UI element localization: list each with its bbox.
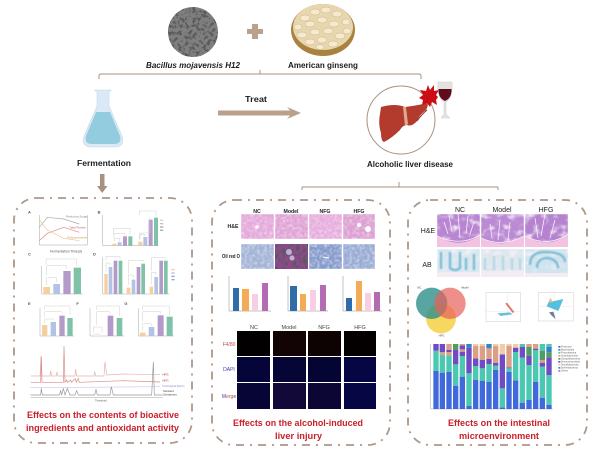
label: H&amp;E row: H&E bbox=[228, 224, 239, 230]
panel title: antioxidant activity: ingredients and antioxidant activity bbox=[26, 423, 180, 434]
chart legend: Campylobacterota bbox=[561, 358, 581, 361]
charts A to G bbox=[28, 210, 175, 336]
label: Alcoholic liver disease: Alcoholic liver disease bbox=[367, 160, 454, 169]
chart E: bars: E bbox=[28, 301, 31, 306]
intestinal column headers: NC bbox=[455, 207, 465, 214]
fluorescence column headers: NFG bbox=[318, 325, 330, 331]
lower bracket connector bbox=[302, 182, 498, 190]
PCA plot 1 bbox=[486, 293, 521, 322]
chart F: bars: F bbox=[76, 301, 79, 306]
chart: HPLC chromatograms: Standard bbox=[163, 389, 174, 393]
panel title: microenvironment: microenvironment bbox=[459, 431, 540, 442]
H&amp;E liver micrographs bbox=[241, 214, 375, 239]
bar chart: liver marker 3 bbox=[343, 276, 382, 311]
Oil red O liver micrographs bbox=[241, 244, 375, 269]
arrow: treat bbox=[218, 107, 301, 119]
H&amp;E intestinal micrographs bbox=[437, 214, 568, 247]
chart legend: Actinobacteriota bbox=[561, 355, 578, 358]
panel: intestinal microenvironment bbox=[408, 200, 587, 445]
liver histology column headers: NFG bbox=[320, 209, 330, 215]
bar chart: liver marker 2 bbox=[288, 276, 328, 311]
intestinal column headers: HFG bbox=[539, 207, 553, 214]
icon: American ginseng dish bbox=[291, 4, 355, 56]
icon: fermentation flask bbox=[83, 90, 123, 147]
label: American ginseng: American ginseng bbox=[288, 61, 358, 70]
chart F: bars bbox=[76, 301, 124, 336]
chart legend: Others bbox=[561, 370, 569, 373]
label: Oil red O row: Oil red O bbox=[222, 254, 240, 260]
label: H&amp;E: H&E bbox=[421, 228, 436, 235]
chart C: bars: C bbox=[28, 252, 31, 257]
chart B: total ginsenoside bars: B bbox=[98, 210, 101, 215]
AB intestinal micrographs bbox=[437, 249, 568, 277]
icon: plus sign bbox=[247, 24, 263, 39]
icon: alcoholic liver disease bbox=[367, 82, 452, 154]
label: Merge: Merge bbox=[222, 394, 236, 400]
label: Bacillus mojavensis H12: Bacillus mojavensis H12 bbox=[146, 61, 241, 70]
chart A: fermentation time lines: Reducing Sugar bbox=[66, 215, 87, 219]
chart: HPLC chromatograms: HFG bbox=[162, 372, 169, 376]
fluorescence column headers: HFG bbox=[354, 325, 366, 331]
chart: HPLC chromatograms: Time(min) bbox=[95, 399, 107, 403]
chart: HPLC chromatograms: NFG bbox=[162, 379, 169, 383]
chart legend: Bacteroidota bbox=[561, 349, 575, 352]
chart G: bars bbox=[124, 301, 174, 336]
top bracket connector bbox=[99, 70, 421, 79]
panel title: intestinal: Effects on the intestinal bbox=[448, 418, 550, 429]
chart A: fermentation time lines: Total Protein bbox=[69, 225, 86, 229]
chart legend bbox=[558, 346, 581, 373]
chart A: fermentation time lines bbox=[28, 210, 88, 253]
chart A: fermentation time lines: A bbox=[28, 210, 31, 215]
PCA plot 2 bbox=[538, 293, 573, 321]
panel title: bioactive ingredients: Effects on the contents of bioactive bbox=[27, 410, 179, 421]
Venn diagram: Model bbox=[461, 285, 469, 289]
fluorescence micrographs bbox=[237, 331, 376, 409]
bar chart: liver marker 1 bbox=[229, 276, 271, 311]
chart B: total ginsenoside bars bbox=[98, 210, 163, 246]
chart D: scavenging rate bars bbox=[93, 252, 175, 294]
chart legend: Deferribacterota bbox=[561, 367, 578, 370]
panel title: alcohol-induced: Effects on the alcohol-induced bbox=[233, 418, 363, 429]
chart legend: Firmicutes bbox=[561, 346, 573, 349]
panel: bioactive ingredients and antioxidant activity bbox=[14, 198, 192, 443]
label: Fermentation: Fermentation bbox=[77, 159, 131, 168]
stacked bar chart: microbial composition bbox=[431, 344, 581, 409]
chart: HPLC chromatograms: FG(Original Batch) bbox=[162, 384, 185, 388]
liver histology column headers: Model bbox=[284, 209, 299, 215]
chart: HPLC chromatograms: Substances bbox=[163, 392, 178, 396]
liver histology column headers bbox=[253, 209, 364, 215]
label: AB: AB bbox=[422, 262, 432, 269]
Venn diagram: NC bbox=[417, 285, 421, 289]
fluorescence column headers: Model bbox=[282, 325, 296, 331]
chart legend: Proteobacteria bbox=[561, 352, 577, 355]
fluorescence column headers: NC bbox=[250, 325, 258, 331]
chart: HPLC chromatograms bbox=[31, 346, 185, 403]
label: DAPI: DAPI bbox=[223, 367, 235, 373]
liver histology column headers: NC bbox=[253, 209, 261, 215]
Venn diagram: HFG bbox=[439, 333, 444, 337]
intestinal column headers: Model bbox=[492, 207, 512, 214]
chart legend: Desulfobacterota bbox=[561, 364, 579, 367]
panel: alcohol-induced liver injury bbox=[212, 200, 390, 445]
chart G: bars: G bbox=[124, 301, 127, 306]
chart A: fermentation time lines: Fermentation Time(d) bbox=[50, 249, 82, 253]
chart D: scavenging rate bars: D bbox=[93, 252, 96, 257]
panel title: liver injury: liver injury bbox=[275, 431, 323, 442]
icon: Bacillus mojavensis micrograph bbox=[168, 7, 218, 57]
fluorescence column headers bbox=[250, 325, 366, 331]
arrow: fermentation down to panel bbox=[97, 174, 108, 193]
intestinal column headers bbox=[455, 207, 553, 214]
chart E: bars bbox=[28, 301, 74, 336]
label: F4/80: F4/80 bbox=[223, 342, 236, 348]
label: Treat: Treat bbox=[245, 95, 267, 104]
liver histology column headers: HFG bbox=[354, 209, 364, 215]
chart legend: Verrucomicrobiota bbox=[561, 361, 580, 364]
chart A: fermentation time lines: Polysaccharide bbox=[67, 235, 88, 239]
chart C: bars bbox=[28, 252, 83, 294]
Venn diagram bbox=[416, 285, 469, 337]
